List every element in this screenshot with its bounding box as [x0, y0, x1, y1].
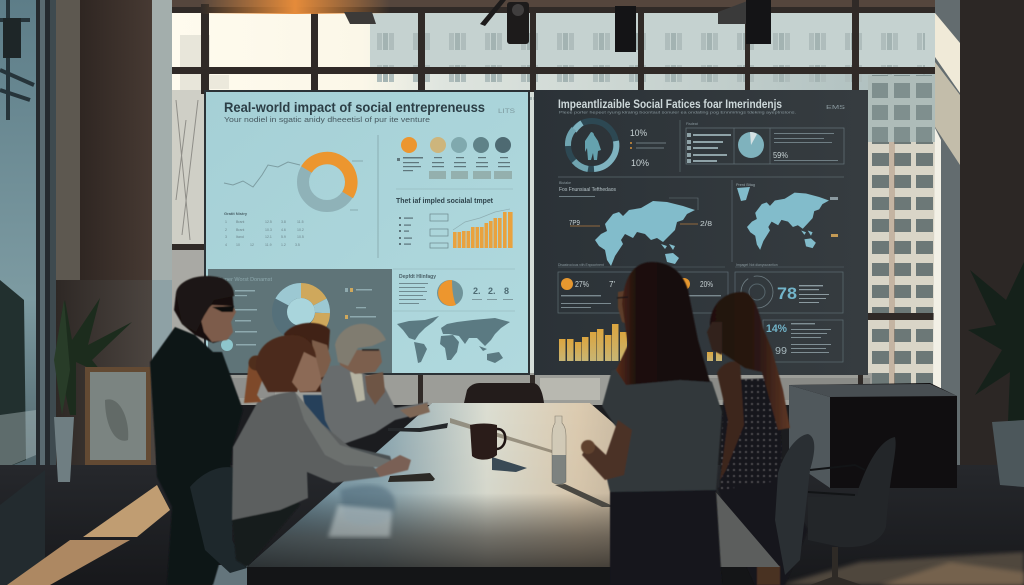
- map panel two: [736, 183, 838, 250]
- lower-right panel: pie: [393, 269, 515, 311]
- data table: 11.5: [297, 220, 304, 224]
- person: older man: [320, 324, 430, 446]
- lower-right panel: pie: 8: [504, 286, 509, 296]
- logo mark: LITS: [498, 109, 515, 115]
- data table: 12.1: [265, 235, 272, 239]
- data table: 4.6: [281, 228, 286, 232]
- stat box: 14%: [763, 320, 843, 362]
- sunlight streaks: [7, 485, 1024, 585]
- framed picture leaning on wall: [85, 367, 151, 465]
- screen: dark infographic: [534, 90, 868, 375]
- heading: Real-world impact of social entrepreneuss: [224, 99, 485, 115]
- bar chart, dark: [559, 324, 722, 361]
- right potted plant: [968, 262, 1024, 487]
- donut chart: [303, 154, 363, 210]
- right wall with sunlight: [933, 0, 1024, 470]
- right storage cabinet: [789, 383, 957, 488]
- lower-right panel: pie: 2.: [473, 286, 481, 296]
- bar chart: [399, 209, 513, 248]
- metric circles: [397, 137, 512, 179]
- background: window and sky: [170, 0, 940, 405]
- window mullions: [170, 0, 940, 405]
- subheading: Pleee porter hepeet ryung kiraing boontaut sonuier ea ondating pog Ennmrings tdeknig ayeptnsions.: [559, 110, 796, 114]
- data table: 3: [225, 235, 227, 239]
- data table: 10.2: [297, 228, 304, 232]
- chair behind seated woman: [190, 467, 247, 573]
- map panel one: Blutake: [559, 181, 571, 185]
- world map, light: [397, 316, 510, 363]
- person: standing man: [150, 276, 243, 585]
- empty chair behind the table: [464, 383, 544, 403]
- stat box: 78: 78: [777, 284, 797, 303]
- section heading: Thet iaf impled socialal tmpet: [396, 196, 493, 205]
- heading: Impeantlizaible Social Fatices foar Imerindenjs: [558, 99, 782, 111]
- line chart: [224, 162, 300, 187]
- person: woman with dotted dress: [707, 292, 808, 585]
- map panel one: Fos Fnunsiaal Tefthedaos: [559, 187, 616, 193]
- meeting table: [247, 403, 780, 585]
- data table: 12.5: [265, 220, 272, 224]
- stat box: 78: [735, 263, 843, 313]
- stat box: percentages: 20%: [700, 280, 713, 289]
- data table: Brant: [236, 228, 244, 232]
- data table: 3.8: [281, 220, 286, 224]
- map panel one: 7P9: [569, 220, 580, 227]
- left potted plant: [54, 298, 132, 482]
- screen: light infographic: [204, 90, 530, 375]
- floor: [0, 465, 1024, 585]
- data table: Gratit Nistry: [224, 211, 248, 216]
- person: woman behind, blue top: [284, 323, 392, 463]
- buildings behind the window: [172, 13, 935, 405]
- person: woman with long hair, grey shirt: [581, 262, 722, 585]
- map panel one: [559, 181, 712, 266]
- stat box: percentages: [558, 263, 728, 313]
- data table: 10.3: [265, 228, 272, 232]
- legend and pie box: 59%: [773, 151, 788, 160]
- papers: [388, 473, 435, 482]
- data table: 12: [250, 243, 254, 247]
- data table: 2: [225, 228, 227, 232]
- stat box: 78: Impaget Not dianyourantion: [736, 263, 778, 267]
- data table: 1: [225, 220, 227, 224]
- subheading: Your nodiel in sgatic anidy dheeetisl of pur ite venture: [224, 115, 430, 124]
- stat box: percentages: Disastrocious vith Enpoorinent: [558, 263, 604, 267]
- map panel one: 2/8: [700, 221, 712, 228]
- table corner in front of the dress: [714, 490, 780, 567]
- data table: 11.9: [265, 243, 272, 247]
- person: seated woman in grey sweater: [232, 335, 411, 567]
- data table: 1.2: [281, 243, 286, 247]
- map panel two: Prerd Bitag: [736, 183, 755, 187]
- data table: 3.5: [295, 243, 300, 247]
- statistics: 10%: [630, 128, 647, 139]
- shadow streaks on table: [328, 418, 615, 537]
- lower-left panel: Deper Worst Donamst: [218, 277, 273, 283]
- data table: [224, 211, 304, 247]
- data table: Itand: [236, 235, 244, 239]
- ceiling spotlights: [344, 0, 771, 52]
- stat box: 14%: 99: [775, 346, 787, 357]
- data table: 10: [236, 243, 240, 247]
- legend and pie box: [686, 122, 844, 164]
- legend and pie box: Fisdeat: [686, 122, 698, 126]
- stat box: 14%: 14%: [766, 323, 787, 335]
- lower-left panel: [208, 269, 392, 373]
- stat box: percentages: 27%: [575, 280, 589, 289]
- statistics: 10%: [631, 158, 650, 169]
- data table: 5.9: [281, 235, 286, 239]
- office chairs: [775, 434, 896, 585]
- water bottle: [552, 416, 566, 484]
- data table: 4: [225, 243, 227, 247]
- tablet: [388, 423, 448, 432]
- data table: 10.5: [297, 235, 304, 239]
- coffee mug: [470, 424, 527, 472]
- stat box: percentages: 7': [609, 280, 615, 289]
- lower-right panel: pie: 2.: [488, 286, 496, 296]
- lower-right panel: pie: Depfdt Hlinfagy: [399, 274, 436, 280]
- data table: Brant: [236, 220, 244, 224]
- left wall and glass door: [0, 0, 172, 500]
- ring with person figure: [568, 121, 616, 169]
- segmented pie: [280, 290, 323, 334]
- statistics: [630, 128, 666, 169]
- logo mark: EMS: [826, 105, 846, 111]
